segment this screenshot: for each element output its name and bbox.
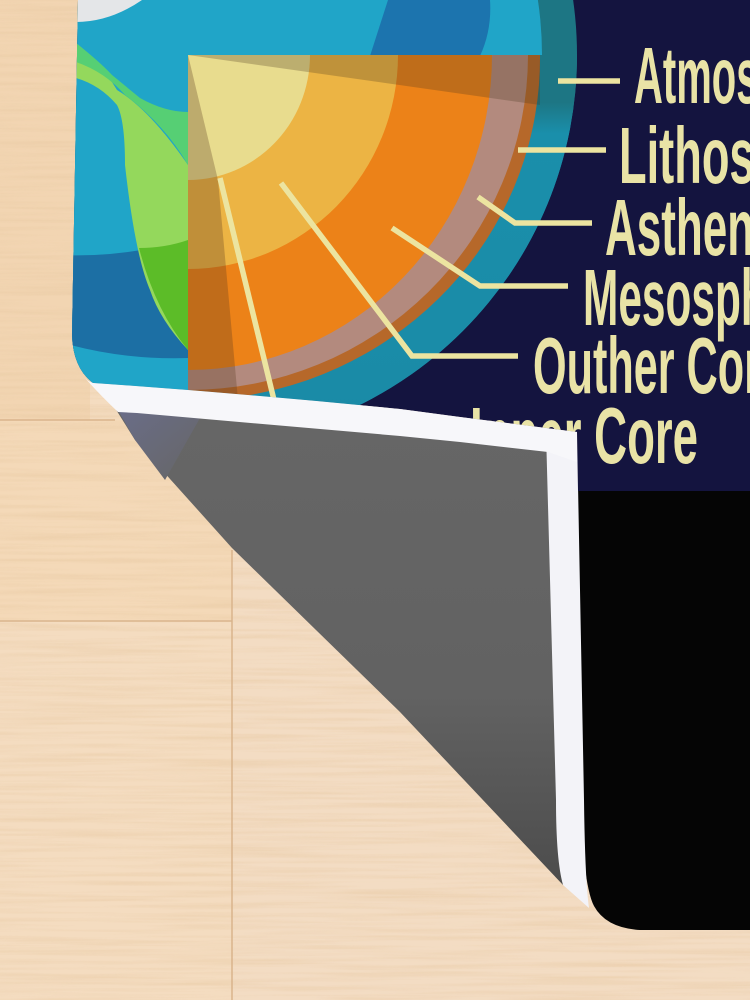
- continent dark green area: [139, 240, 188, 350]
- lithosphere rim: [188, 55, 540, 400]
- navy upper curtain panel: [0, 0, 750, 492]
- mantle: [188, 55, 492, 370]
- inner core: [188, 55, 310, 180]
- outer core: [188, 55, 398, 269]
- earth diagram: [72, 0, 620, 405]
- cutaway layers: [188, 55, 540, 400]
- ocean globe: [72, 0, 542, 398]
- continent medium green area: [76, 43, 188, 165]
- atmosphere ring: [72, 0, 577, 405]
- white right hem: [546, 432, 589, 908]
- curtain fold back side: [115, 408, 563, 885]
- black lower curtain panel: [575, 485, 750, 930]
- ocean dark patches: [72, 250, 188, 358]
- white bottom hem: [85, 378, 577, 462]
- translucent top wedge: [188, 55, 540, 105]
- label: Inner Core: Inner Core: [470, 391, 698, 480]
- ice cap: [76, 0, 142, 22]
- fold shadow tint near corner: [118, 410, 200, 480]
- layer labels: [470, 32, 750, 480]
- asthenosphere: [188, 55, 528, 390]
- leader lines: [220, 81, 620, 400]
- continent light green body: [76, 43, 188, 350]
- translucent left wedge: [188, 55, 238, 400]
- continent: [76, 43, 188, 350]
- ocean lower right band: [251, 55, 577, 405]
